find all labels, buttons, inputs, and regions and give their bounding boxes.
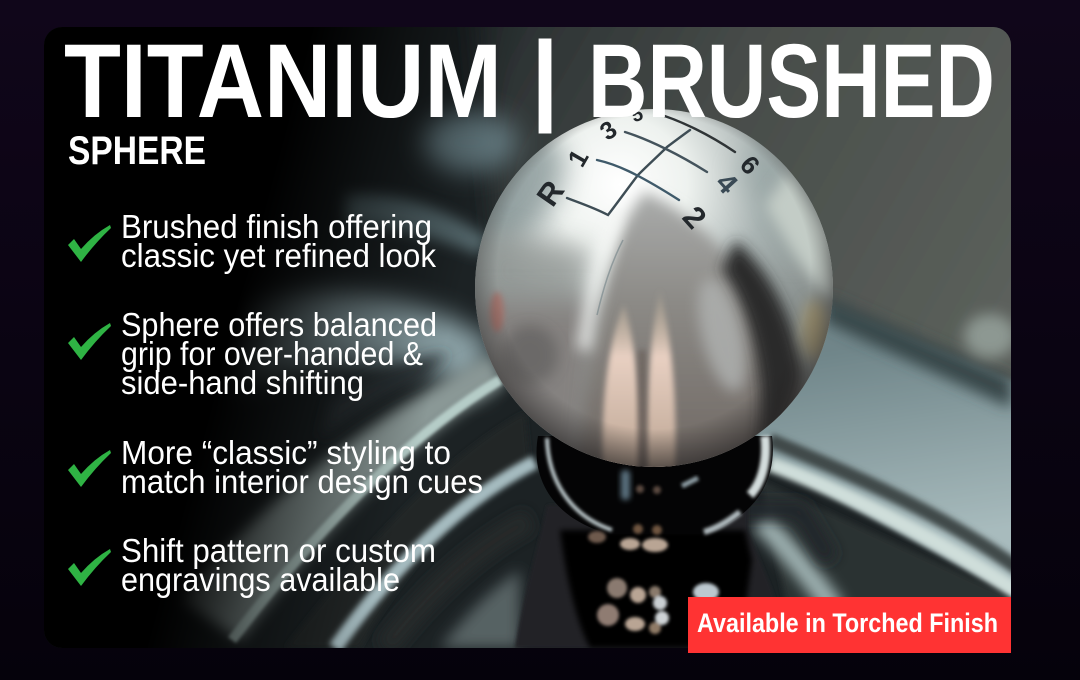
shift pattern numbers [536,112,759,230]
title: | [531,21,559,134]
feature: sphere grip: grip for over-handed & [121,335,423,372]
title [64,21,995,140]
subtitle: SPHERE [68,129,206,173]
feature: sphere grip: side-hand shifting [121,364,364,401]
callout: torched finish badge [688,597,1011,653]
shift pattern numbers: 1 [561,144,595,172]
feature list [68,208,483,598]
feature: brushed finish [68,208,436,274]
shift pattern numbers: 6 [734,150,766,180]
feature: classic styling: match interior design cues [121,463,483,500]
feature: classic styling [68,434,483,500]
feature: engravings: Shift pattern or custom [121,532,436,569]
feature: brushed finish: Brushed finish offering [121,208,432,245]
shift pattern engraving [567,113,735,215]
feature: engravings [68,532,436,598]
shift pattern numbers: 3 [595,115,622,146]
icon: titanium shift knob [475,109,833,467]
callout: torched finish badge: Available in Torched Finish [697,608,998,638]
feature: sphere grip [68,306,437,401]
shifter collar and base [515,436,790,648]
title: TITANIUM [64,23,502,140]
feature: brushed finish: classic yet refined look [121,237,436,274]
shift pattern numbers: 5 [629,103,645,127]
shift pattern numbers: R [530,174,571,212]
feature: classic styling: More “classic” styling to [121,434,451,471]
left dark fade overlay [44,27,486,648]
feature: sphere grip: Sphere offers balanced [121,306,437,343]
shift pattern numbers: 2 [676,199,713,235]
shift pattern numbers: 4 [709,167,744,200]
feature: engravings: engravings available [121,561,400,598]
